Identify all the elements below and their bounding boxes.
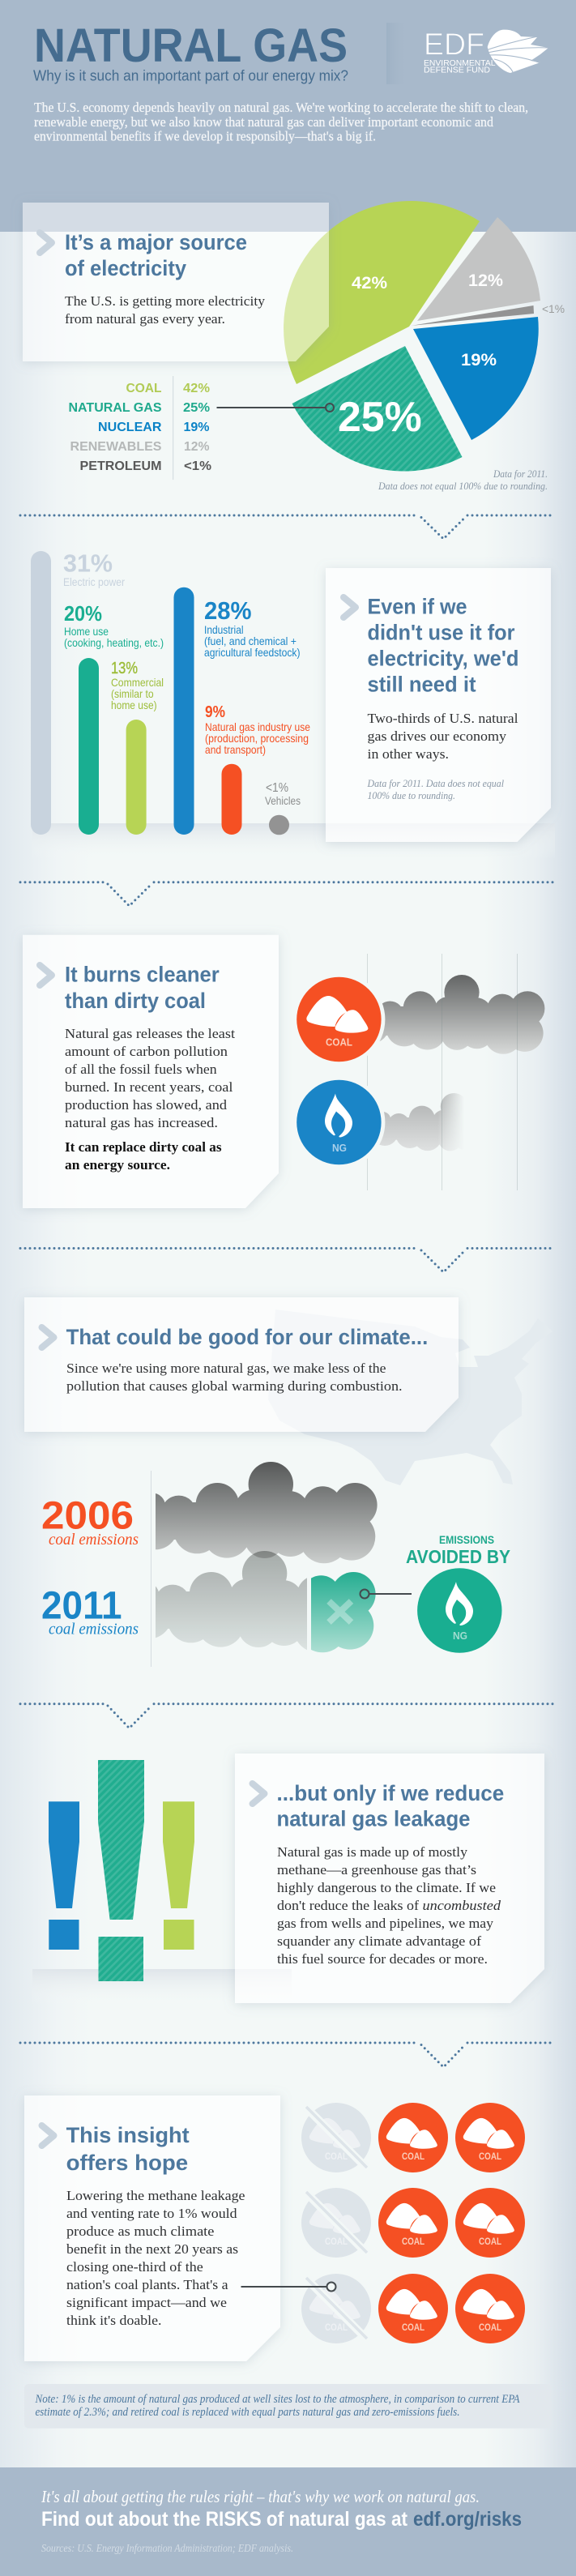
- call to action: Find out about the RISKS of natural gas at: [41, 2508, 408, 2531]
- bar: natural gas industry use: [222, 764, 241, 835]
- exclamation: green: [163, 1801, 194, 1950]
- chevron icon: [42, 1327, 53, 1348]
- legend table: 42%: [183, 382, 210, 395]
- label: electric power: [63, 549, 125, 588]
- emissions chart: 2006 vs 2011: [41, 1462, 510, 1667]
- retired coal badges: COAL: [325, 2151, 348, 2162]
- body text: gas from wells and pipelines, we may: [277, 1916, 494, 1931]
- body text: gas drives our economy: [368, 728, 507, 744]
- coal plant badge grid: [301, 2103, 525, 2343]
- label: industrial: 28%: [204, 596, 251, 625]
- active coal badges: [378, 2103, 525, 2343]
- label: electric power: Electric power: [63, 575, 125, 588]
- sources: Sources: U.S. Energy Information Administration; EDF analysis.: [41, 2543, 293, 2555]
- body text: uncombusted: [423, 1898, 501, 1913]
- emission comparison chart: coal vs natural gas: [292, 954, 544, 1190]
- body text: burned. In recent years, coal: [65, 1079, 233, 1095]
- pie chart: electricity sources: [284, 201, 565, 472]
- icon: X mark: [329, 1601, 352, 1622]
- EDF logo: [386, 23, 549, 84]
- body text: benefit in the next 20 years as: [66, 2241, 238, 2257]
- label: industrial: agricultural feedstock): [204, 646, 300, 659]
- body text: and venting rate to 1% would: [66, 2206, 237, 2221]
- heading: didn't use it for: [368, 621, 515, 645]
- note box: Note: 1% is the amount of natural gas produced at well sites lost to the atmosphere, in comparison to current EPA: [35, 2393, 520, 2406]
- legend table: COAL: [126, 382, 162, 395]
- icon: coal badge: COAL: [326, 1036, 352, 1049]
- active coal badges: COAL: [402, 2236, 425, 2247]
- body text: [65, 293, 266, 327]
- heading: It’s a major source: [65, 230, 247, 254]
- body text: squander any climate advantage of: [277, 1933, 481, 1949]
- slice: coal 42%: [284, 201, 480, 384]
- active coal badges: COAL: [402, 2322, 425, 2333]
- pie labels: [338, 271, 503, 441]
- label: industrial: (fuel, and chemical +: [204, 634, 297, 647]
- label: natural gas industry use: and transport): [205, 743, 266, 756]
- heading: than dirty coal: [65, 989, 206, 1013]
- label: commercial: home use): [111, 698, 157, 711]
- chevron icon: [40, 233, 52, 253]
- body text: methane—a greenhouse gas that’s: [277, 1862, 476, 1878]
- call to action: edf.org/risks: [413, 2508, 522, 2531]
- label: natural gas industry use: [205, 703, 310, 756]
- legend table: [68, 376, 211, 480]
- bar: home use: [79, 658, 99, 835]
- pie labels: 19%: [461, 351, 497, 370]
- body text: significant impact—and we: [66, 2295, 227, 2310]
- chevron icon: [343, 597, 356, 617]
- label: emissions avoided by: [406, 1533, 510, 1567]
- bold callout text: It can replace dirty coal as: [65, 1139, 222, 1155]
- panel: burns cleaner: [23, 935, 279, 1208]
- EDF logo: EDF: [424, 28, 484, 62]
- label: 2011: [41, 1585, 139, 1638]
- data note: pie: Data for 2011.: [493, 468, 548, 480]
- data note: pie: Data does not equal 100% due to rounding.: [378, 480, 548, 492]
- label: home use: [64, 601, 164, 649]
- body text: [65, 1026, 235, 1130]
- pie labels: 25%: [338, 394, 422, 441]
- retired coal badges: COAL: [325, 2236, 348, 2247]
- heading: This insight: [66, 2123, 190, 2147]
- label: vehicles: Vehicles: [265, 794, 301, 807]
- retired coal badges: COAL: [325, 2322, 348, 2333]
- body text: think it's doable.: [66, 2313, 162, 2328]
- note box: estimate of 2.3%; and retired coal is replaced with equal parts natural gas and zero-emissions fuels.: [36, 2406, 460, 2419]
- bold callout text: an energy source.: [65, 1157, 170, 1173]
- EDF logo: DEFENSE FUND: [424, 66, 490, 75]
- body text: [368, 711, 518, 762]
- heading: [368, 595, 518, 697]
- icon: coal badge: [292, 973, 385, 1066]
- slice: renewables 12%: [417, 217, 540, 321]
- body text: from natural gas every year.: [65, 311, 225, 327]
- slice: natural gas 25%: [292, 346, 462, 472]
- heading: of electricity: [65, 256, 186, 280]
- active coal badges: COAL: [479, 2151, 501, 2162]
- body text: Lowering the methane leakage: [66, 2188, 245, 2203]
- bold callout text: [65, 1139, 222, 1173]
- icon: natural gas badge: [292, 1076, 385, 1168]
- body text: this fuel source for decades or more.: [277, 1951, 488, 1967]
- connector: avoided emissions to natural gas: [360, 1590, 412, 1598]
- body text: [66, 2188, 245, 2328]
- cloud: 2006 emissions: [134, 1462, 378, 1563]
- heading: [65, 963, 220, 1013]
- chevron icon: [42, 2125, 53, 2146]
- footer tagline: It's all about getting the rules right – that's why we work on natural gas.: [41, 2487, 480, 2506]
- active coal badges: COAL: [402, 2151, 425, 2162]
- label: commercial: 13%: [111, 660, 138, 677]
- panel: even if we didn't use it: [326, 568, 551, 842]
- heading: Even if we: [368, 595, 467, 619]
- label: home use: 20%: [64, 601, 102, 626]
- heading: natural gas leakage: [277, 1807, 470, 1831]
- body text: closing one-third of the: [66, 2259, 203, 2275]
- label: commercial: [111, 660, 164, 711]
- heading: [66, 2123, 190, 2175]
- heading: That could be good for our climate...: [66, 1325, 428, 1349]
- label: 2006: coal emissions: [49, 1531, 139, 1549]
- body text: in other ways.: [368, 746, 449, 762]
- label: electric power: 31%: [63, 549, 113, 578]
- body text: amount of carbon pollution: [65, 1044, 228, 1059]
- chevron icon: [40, 965, 52, 985]
- pie chart: electricity sources: <1%: [542, 302, 565, 315]
- icon: natural gas badge: NG: [453, 1630, 467, 1642]
- heading: It burns cleaner: [65, 963, 220, 987]
- body text: pollution that causes global warming during combustion.: [66, 1378, 403, 1394]
- bar chart: other uses of natural gas: [31, 549, 555, 859]
- slice: petroleum: [411, 305, 534, 326]
- legend table: <1%: [184, 459, 211, 473]
- heading: offers hope: [66, 2151, 188, 2175]
- heading: [65, 230, 247, 280]
- label: emissions avoided by: AVOIDED BY: [406, 1546, 510, 1567]
- intro text: [34, 100, 528, 144]
- label: industrial: [204, 596, 300, 659]
- legend table: 25%: [183, 401, 210, 415]
- connector: text to retired coal: [241, 2282, 335, 2292]
- data note: 100% due to rounding.: [368, 789, 455, 801]
- map of the United States: [268, 1309, 553, 1485]
- body text: Natural gas releases the least: [65, 1026, 235, 1041]
- data note: Data for 2011. Data does not equal: [367, 777, 504, 789]
- body text: produce as much climate: [66, 2224, 214, 2239]
- bar: vehicles: [269, 815, 289, 835]
- body text: natural gas has increased.: [65, 1115, 218, 1130]
- bar: commercial: [126, 720, 147, 835]
- heading: ...but only if we reduce: [277, 1781, 504, 1805]
- legend table: RENEWABLES: [70, 440, 162, 454]
- body text: [277, 1844, 501, 1967]
- exclamation marks: [32, 1760, 292, 2005]
- data note: [367, 777, 504, 801]
- chevron icon: [253, 1784, 264, 1804]
- subtitle: Why is it such an important part of our energy mix?: [33, 68, 348, 84]
- label: natural gas industry use: (production, processing: [205, 732, 309, 745]
- label: home use: (cooking, heating, etc.): [64, 636, 164, 649]
- body text: of all the fossil fuels when: [65, 1062, 217, 1077]
- legend table: NUCLEAR: [98, 421, 162, 434]
- label: natural gas industry use: 9%: [205, 703, 225, 721]
- legend table: 12%: [184, 440, 209, 454]
- panel: major source of electricity: [23, 203, 329, 361]
- title: NATURAL GAS: [34, 19, 348, 72]
- icon: natural gas badge: [417, 1568, 502, 1653]
- panel: this insight offers hope: [24, 2095, 280, 2361]
- label: emissions avoided by: EMISSIONS: [439, 1533, 494, 1546]
- body text: nation's coal plants. That's a: [66, 2277, 228, 2292]
- legend table: PETROLEUM: [79, 459, 162, 473]
- body text: Natural gas is made up of mostly: [277, 1844, 468, 1860]
- bar: industrial: [173, 587, 194, 835]
- active coal badges: COAL: [479, 2236, 501, 2247]
- bar: electric power: [31, 551, 51, 835]
- body text: The U.S. is getting more electricity: [65, 293, 266, 309]
- cloud: coal emissions: [355, 975, 544, 1054]
- exclamation: teal hatched: [98, 1760, 144, 1981]
- label: 2011: 2011: [41, 1585, 122, 1628]
- label: commercial: (similar to: [111, 687, 154, 700]
- panel: good for our climate: [24, 1297, 459, 1432]
- icon: natural gas badge: NG: [332, 1142, 347, 1154]
- cloud: avoided emissions: [311, 1572, 376, 1653]
- body text: production has slowed, and: [65, 1097, 228, 1113]
- slice: nuclear 19%: [413, 317, 539, 440]
- body text: Since we're using more natural gas, we make less of the: [66, 1361, 386, 1376]
- footer band: [0, 2467, 576, 2576]
- label: industrial: Industrial: [204, 623, 243, 636]
- label: vehicles: <1%: [266, 781, 288, 795]
- connector: legend to pie: [217, 404, 334, 412]
- header band: [0, 0, 576, 232]
- label: home use: Home use: [64, 625, 109, 638]
- exclamation: blue: [49, 1801, 79, 1950]
- data note: pie: [378, 468, 548, 492]
- heading: electricity, we'd: [368, 647, 518, 671]
- label: natural gas industry use: Natural gas industry use: [205, 720, 310, 733]
- intro text: environmental benefits if we develop it responsibly—that's a big if.: [34, 128, 376, 144]
- legend table: 19%: [183, 421, 209, 434]
- label: vehicles: [265, 781, 301, 807]
- label: 2011: coal emissions: [49, 1621, 139, 1638]
- pie labels: 12%: [468, 271, 503, 290]
- intro text: The U.S. economy depends heavily on natural gas. We're working to accelerate the shift to clean,: [34, 100, 528, 115]
- retired coal badges: [301, 2103, 371, 2343]
- heading: [277, 1781, 504, 1831]
- label: commercial: Commercial: [111, 676, 164, 689]
- cloud: 2011 emissions: [156, 1551, 307, 1650]
- label: 2006: 2006: [41, 1495, 134, 1538]
- active coal badges: COAL: [479, 2322, 501, 2333]
- body text: highly dangerous to the climate. If we: [277, 1880, 496, 1895]
- intro text: renewable energy, but we also know that natural gas can deliver important economic and: [34, 114, 494, 130]
- heading: still need it: [368, 673, 476, 697]
- body text: don't reduce the leaks of: [277, 1898, 419, 1913]
- EDF logo: ENVIRONMENTAL: [424, 59, 496, 68]
- body text: [66, 1361, 403, 1394]
- body text: Two-thirds of U.S. natural: [368, 711, 518, 726]
- panel: reduce natural gas leakage: [235, 1754, 544, 2003]
- note box: [24, 2384, 552, 2429]
- pie labels: 42%: [352, 274, 387, 293]
- cloud: natural gas emissions: [379, 1093, 462, 1151]
- legend table: NATURAL GAS: [68, 401, 162, 415]
